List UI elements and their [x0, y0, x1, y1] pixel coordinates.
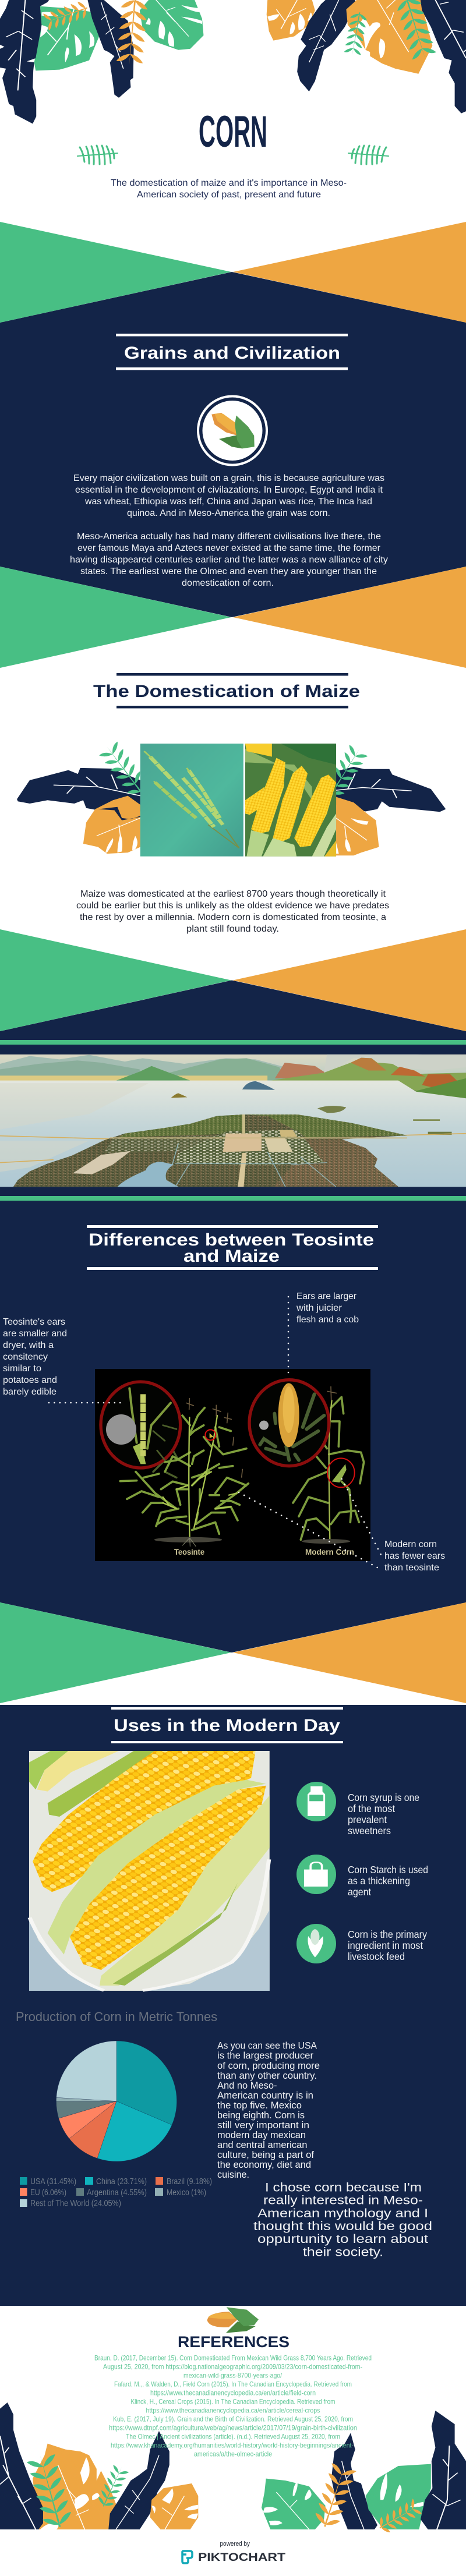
list item: corn syrup: of the most — [348, 1803, 395, 1814]
list item: livestock feed: ingredient in most — [348, 1940, 423, 1951]
footer: powered by piktochart — [182, 2540, 285, 2564]
divider triangles two — [0, 567, 466, 668]
chart legend: EU (6.06%) — [30, 2188, 66, 2198]
text block: pie explanation: being eighth. Corn is — [217, 2110, 305, 2121]
text block: pie explanation: of corn, producing more — [217, 2060, 320, 2071]
text block: pie explanation: the top five. Mexico — [217, 2100, 302, 2111]
text block: pie explanation: culture, being a part of — [217, 2149, 314, 2160]
callout: fewer ears: Modern corn — [384, 1540, 437, 1549]
title: CORN — [199, 107, 267, 157]
text block: pie explanation: As you can see the USA — [217, 2040, 317, 2051]
photo: teosinte vs modern corn plants: Teosinte — [174, 1547, 204, 1556]
heading: and Maize — [183, 1247, 280, 1266]
text block: references list: Fafard, M.,, & Walden, D., Field Corn (2015). In The Canadian Encyclopedia. Retrieved from — [114, 2380, 352, 2388]
chart legend: USA (31.45%) — [30, 2177, 76, 2186]
subtitle: The domestication of maize and it's importance in Meso- — [111, 178, 347, 188]
heading — [111, 1707, 343, 1743]
heading: Uses in the Modern Day — [114, 1716, 341, 1735]
photo: teosinte spikes — [140, 744, 243, 857]
text block: references list: https://www.thecanadianencyclopedia.ca/en/article/field-corn — [150, 2389, 316, 2397]
photo: modern corn ears — [245, 744, 336, 857]
callout: teosinte ears: consitency — [3, 1352, 48, 1362]
footer: powered by piktochart: PIKTOCHART — [198, 2551, 285, 2564]
callout: larger ears: flesh and a cob — [296, 1315, 359, 1325]
icon: left sprig — [77, 146, 118, 164]
text block: why corn: American mythology and I — [257, 2207, 428, 2220]
plant: modern corn — [293, 1386, 364, 1544]
text block: pie explanation: still very important in — [217, 2119, 309, 2131]
photo: teosinte vs modern corn plants — [95, 1369, 370, 1561]
chart legend: Mexico (1%) — [167, 2188, 206, 2198]
chart legend — [20, 2177, 212, 2208]
icon: bottle — [308, 1786, 325, 1816]
bottom foliage — [0, 2402, 466, 2536]
text block: paragraph one: essential in the development of civilazations. In Europe, Egypt and India it — [75, 485, 383, 495]
heading — [116, 334, 348, 370]
text block: why corn: oppurtunity to learn about — [257, 2232, 428, 2246]
painting: lake city — [0, 1055, 466, 1187]
icon: right sprig — [348, 146, 389, 164]
foliage behind photos — [17, 740, 446, 855]
heading — [87, 1225, 378, 1270]
callout: teosinte ears: similar to — [3, 1364, 41, 1374]
callout: teosinte ears — [3, 1317, 123, 1403]
panel: tenochtitlan image band — [0, 1040, 466, 1201]
list item: corn syrup: prevalent — [348, 1814, 387, 1825]
text block: references list: https://www.thecanadianencyclopedia.ca/en/article/cereal-crops — [146, 2406, 320, 2414]
heading: Differences between Teosinte — [89, 1230, 374, 1250]
text block: why corn: I chose corn because I'm — [265, 2181, 422, 2195]
chart legend: China (23.71%) — [96, 2177, 147, 2186]
text block: pie explanation: American country is in — [217, 2090, 313, 2101]
callout: fewer ears: has fewer ears — [384, 1551, 445, 1561]
chart legend: Rest of The World (24.05%) — [30, 2199, 121, 2208]
icon: bag — [304, 1862, 328, 1887]
list item: corn syrup — [296, 1782, 419, 1837]
text block: references list: Kub, E. (2017, July 19). Grain and the Birth of Civilization. Retrieved August 25, 2020, from — [113, 2415, 353, 2423]
callout: larger ears: with juicier — [296, 1303, 343, 1313]
text block: paragraph two: ever famous Maya and Aztecs never existed at the same time, the former — [77, 543, 381, 553]
divider triangles three — [0, 929, 466, 1031]
callout: teosinte ears: dryer, with a — [3, 1340, 54, 1350]
photo: corn on a plate — [29, 1751, 270, 1991]
text block: maize paragraph: Maize was domesticated at the earliest 8700 years though theoretically it — [80, 889, 386, 899]
text block: pie explanation: And no Meso- — [217, 2080, 277, 2091]
chart title: Production of Corn in Metric Tonnes — [16, 2009, 217, 2024]
text block: references list: Braun, D. (2017, December 15). Corn Domesticated From Mexican Wild Grass 8,700 Years Ago. Retrieved — [94, 2354, 372, 2362]
heading: The Domestication of Maize — [93, 682, 360, 701]
zoom: teosinte ear — [101, 1382, 181, 1468]
callout: larger ears — [288, 1291, 359, 1378]
callout: teosinte ears: potatoes and — [3, 1375, 57, 1385]
text block: why corn: really interested in Meso- — [263, 2194, 423, 2207]
callout: teosinte ears: Teosinte's ears — [3, 1317, 65, 1327]
text block: why corn: their society. — [303, 2245, 383, 2259]
text block: paragraph one: Every major civilization was built on a grain, this is because agriculture was — [73, 473, 384, 483]
text block: references list: mexican-wild-grass-8700-years-ago/ — [183, 2371, 283, 2379]
plant: teosinte — [120, 1398, 248, 1547]
text block: references list: August 25, 2020, from https://blog.nationalgeographic.org/2009/03/23/corn-domesticated-from- — [103, 2362, 362, 2370]
list item: livestock feed: Corn is the primary — [348, 1929, 427, 1940]
list item: corn syrup: sweetners — [348, 1825, 391, 1837]
heading: REFERENCES — [178, 2333, 290, 2351]
text block: paragraph two: domestication of corn. — [182, 578, 274, 588]
callout: teosinte ears: barely edible — [3, 1387, 57, 1397]
chart legend: Brazil (9.18%) — [167, 2177, 212, 2186]
text block: pie explanation: is the largest producer — [217, 2050, 313, 2061]
heading: Grains and Civilization — [124, 344, 340, 363]
panel: differences between teosinte and maize — [3, 1225, 445, 1573]
text block: pie explanation: than any other country. — [217, 2070, 317, 2081]
panel: navy section background — [0, 272, 466, 617]
photo: teosinte vs modern corn plants: Modern Corn — [305, 1547, 354, 1556]
text block: maize paragraph: could be earlier but this is unlikely as the oldest evidence we have predates — [76, 901, 389, 911]
text block: paragraph two: Meso-America actually has had many different civilisations live there, the — [77, 532, 381, 542]
text block: pie explanation: modern day mexican — [217, 2129, 306, 2140]
list item: corn starch: as a thickening — [348, 1875, 410, 1887]
text block: references list: https://www.khanacademy.org/humanities/world-history/world-history-beginnings/ancient- — [111, 2441, 354, 2449]
list item: corn syrup: Corn syrup is one — [348, 1792, 419, 1803]
text block: references list: Klinck, H., Cereal Crops (2015). In The Canadian Encyclopedia. Retrieved from — [130, 2397, 336, 2405]
pie chart — [56, 2041, 176, 2161]
heading — [93, 673, 360, 708]
panel: the domestication of maize — [17, 673, 446, 934]
panel: uses in the modern day — [0, 1705, 466, 2306]
text block: maize paragraph: the rest by over a millennia. Modern corn is domesticated from teosinte, a — [80, 912, 386, 922]
text block: references list: https://www.dtnpf.com/agriculture/web/ag/news/article/2017/07/19/grain-birth-civilization — [109, 2423, 357, 2432]
panel: header — [0, 0, 466, 200]
chart legend: Argentina (4.55%) — [87, 2188, 147, 2198]
list item: livestock feed — [296, 1924, 427, 1963]
list item: corn starch: agent — [348, 1886, 371, 1898]
callout: fewer ears: than teosinte — [384, 1563, 439, 1573]
icon: corn cob — [308, 1929, 323, 1958]
callout: fewer ears — [239, 1479, 445, 1573]
text block: references list: americas/a/the-olmec-article — [194, 2450, 272, 2458]
text block: pie explanation: the economy, diet and — [217, 2159, 311, 2170]
list item: livestock feed: livestock feed — [348, 1951, 405, 1962]
footer: powered by piktochart: powered by — [220, 2540, 250, 2547]
text block: pie explanation: and central american — [217, 2139, 308, 2150]
divider triangles four — [0, 1602, 466, 1703]
text block: why corn: thought this would be good — [253, 2220, 432, 2233]
text block: references list: The Olmec | Ancient civilizations (article). (n.d.). Retrieved August 25, 2020, from — [126, 2432, 340, 2440]
list item: corn starch — [296, 1855, 428, 1898]
text block: paragraph one: quinoa. And in Meso-America the grain was corn. — [127, 508, 330, 518]
icon: piktochart logo — [182, 2551, 192, 2563]
callout: teosinte ears: are smaller and — [3, 1329, 67, 1339]
zoom: modern ear — [249, 1380, 329, 1466]
text block: paragraph one: was wheat, Ethiopia was teff, China and Japan was rice, The Inca had — [84, 497, 372, 507]
panel: references — [0, 2307, 466, 2536]
icon: corn in circle — [197, 395, 268, 466]
text block: paragraph two: having disappeared centuries earlier and the latter was a new alliance of city — [70, 555, 388, 565]
divider triangles one — [0, 222, 466, 323]
panel: grains and civilization — [73, 334, 384, 518]
text block: pie explanation: cuisine. — [217, 2169, 249, 2180]
subtitle: American society of past, present and future — [137, 190, 321, 200]
icon: corn — [207, 2307, 259, 2333]
callout: larger ears: Ears are larger — [296, 1291, 357, 1301]
panel: navy section two background — [0, 981, 466, 1653]
text block: paragraph two: states. The earliest were the Olmec and even they are younger than the — [80, 567, 377, 576]
top foliage — [0, 0, 466, 123]
list item: corn starch: Corn Starch is used — [348, 1864, 428, 1876]
text block: maize paragraph: plant still found today. — [186, 924, 279, 934]
